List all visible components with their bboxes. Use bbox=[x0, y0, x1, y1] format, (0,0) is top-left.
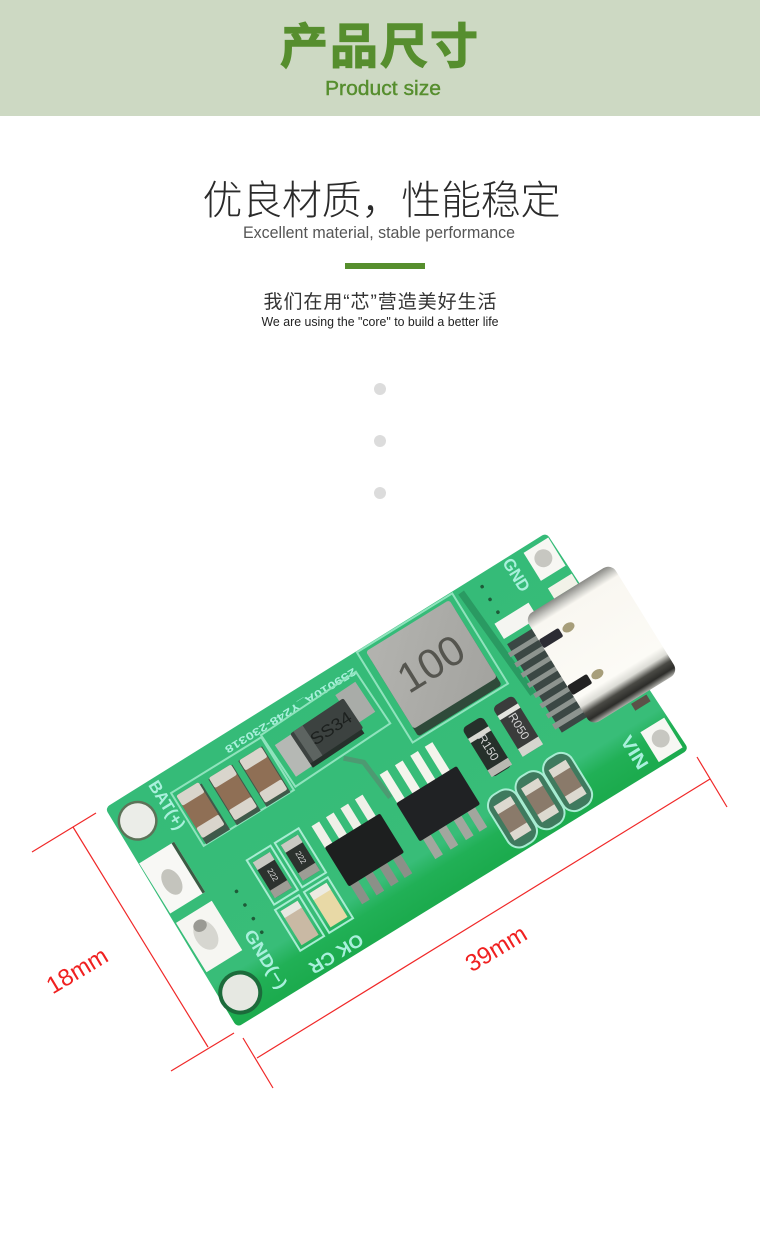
dimension: 18mm: 18mm bbox=[42, 942, 113, 1000]
LED right bbox=[304, 877, 353, 933]
green divider bbox=[345, 263, 425, 269]
usb pads bbox=[493, 574, 582, 639]
pad bottom right bbox=[640, 718, 683, 762]
label BAT(+): BAT(+) bbox=[144, 777, 189, 833]
label GND top: GND bbox=[499, 555, 534, 595]
silk outline around inductor bbox=[357, 593, 508, 743]
heading: 优良材质，性能稳定 bbox=[202, 179, 560, 223]
silk code: 259010A_Y248-230318 bbox=[222, 665, 358, 755]
capacitors bbox=[171, 737, 294, 846]
title: 产品尺寸 bbox=[280, 21, 478, 74]
small capacitors bbox=[482, 748, 598, 852]
resistor 222 right: 222 bbox=[293, 850, 308, 866]
label VIN: VIN bbox=[616, 732, 652, 773]
diode SS34: SS34 bbox=[307, 708, 356, 749]
resistor 222 left bbox=[247, 846, 298, 905]
label OK CR: OK CR bbox=[305, 929, 367, 978]
board bbox=[108, 536, 682, 1021]
inductor bbox=[366, 600, 502, 737]
resistor R150 bbox=[462, 716, 513, 778]
usb-c connector bbox=[524, 563, 679, 726]
dark traces bbox=[461, 588, 533, 698]
test points bbox=[166, 584, 578, 935]
resistor R050 bbox=[492, 695, 543, 757]
dimension: 39mm: 39mm bbox=[461, 920, 532, 978]
dimension: 18mm bbox=[32, 813, 234, 1071]
small chip near usb bbox=[631, 694, 651, 711]
inductor: 100 bbox=[389, 625, 473, 702]
diode SS34 bbox=[261, 672, 390, 787]
three dots bbox=[374, 383, 386, 499]
white pad 1 bbox=[139, 842, 205, 914]
subtitle: Product size: Product size bbox=[325, 78, 441, 100]
circuit board photo illustration bbox=[102, 514, 715, 1027]
resistor R050: R050 bbox=[505, 710, 533, 742]
LED left bbox=[275, 895, 324, 951]
mounting hole top left bbox=[110, 793, 165, 848]
tagline: 我们在用“芯”营造美好生活 bbox=[264, 291, 496, 313]
usb pins bbox=[504, 626, 591, 735]
white pad 2 bbox=[176, 901, 242, 972]
resistor 222 right bbox=[275, 828, 326, 887]
IC chip 2 bbox=[379, 738, 492, 861]
resistor R150: R150 bbox=[475, 732, 502, 764]
heading english: Excellent material, stable performance bbox=[243, 223, 515, 242]
pad top right bbox=[524, 538, 566, 581]
dimension: 39mm bbox=[243, 757, 727, 1088]
IC chip 1 bbox=[311, 792, 416, 905]
mounting hole bottom left bbox=[210, 962, 271, 1023]
tagline english: We are using the "core" to build a better life bbox=[262, 315, 499, 329]
header band bbox=[0, 0, 760, 116]
label GND(-): GND(−) bbox=[240, 926, 291, 992]
resistor 222 left: 222 bbox=[265, 867, 280, 883]
